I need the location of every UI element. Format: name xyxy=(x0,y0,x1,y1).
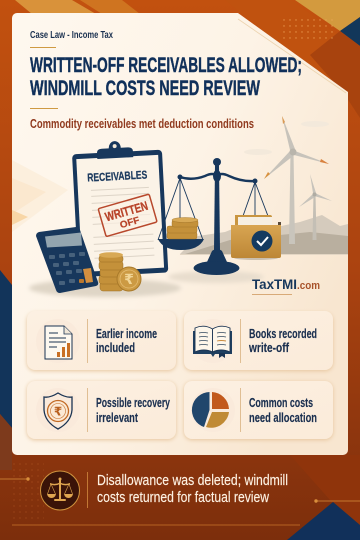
icon: rupee shield xyxy=(44,393,72,429)
footer icon: scales badge xyxy=(40,471,80,510)
card: possible recovery irrelevant: irrelevant xyxy=(96,410,138,425)
card: books recorded write-off xyxy=(184,311,333,371)
illustration: coins and rupee: ₹ xyxy=(124,272,134,288)
card: books recorded write-off: Books recorded xyxy=(249,326,317,341)
stamp: written off xyxy=(98,194,157,237)
card: common costs need allocation xyxy=(184,381,333,440)
card: possible recovery irrelevant xyxy=(27,381,176,440)
icon: report document xyxy=(45,326,72,359)
card: earlier income included xyxy=(27,311,176,371)
card: books recorded write-off: write-off xyxy=(248,340,290,355)
illustration: folder with check xyxy=(231,215,281,260)
subtitle: Commodity receivables met deduction conditions xyxy=(30,116,254,131)
footer conclusion text: costs returned for factual review xyxy=(97,489,269,506)
illustration: clipboard xyxy=(71,139,168,277)
logo: TaxTMI.com: TaxTMI xyxy=(252,276,297,292)
icon: open book xyxy=(193,326,232,358)
eyebrow: case law xyxy=(30,29,113,48)
stamp: written off: WRITTEN xyxy=(103,199,150,224)
card: possible recovery irrelevant: Possible recovery xyxy=(96,395,171,410)
card: common costs need allocation: Common costs xyxy=(249,395,313,410)
footer conclusion text: Disallowance was deleted; windmill xyxy=(97,472,288,489)
card: earlier income included: Earlier income xyxy=(96,326,157,341)
card: earlier income included: included xyxy=(96,340,135,355)
icon: pie chart xyxy=(192,392,229,428)
logo: TaxTMI.com xyxy=(252,276,320,295)
card: common costs need allocation: need allocation xyxy=(249,410,317,425)
illustration: coins and rupee xyxy=(99,252,141,291)
eyebrow: case law: Case Law - Income Tax xyxy=(30,29,113,41)
illustration: wind turbines and hills xyxy=(180,116,348,255)
footer divider xyxy=(86,472,89,508)
stamp: written off: OFF xyxy=(119,215,141,231)
ground shadow xyxy=(29,271,264,297)
icon: rupee shield: ₹ xyxy=(54,404,62,418)
main panel xyxy=(12,13,348,455)
title xyxy=(30,53,302,100)
illustration: clipboard: RECEIVABLES xyxy=(87,169,148,185)
illustration: calculator xyxy=(36,227,98,293)
illustration: balance scale xyxy=(158,158,268,275)
footer conclusion text xyxy=(97,472,288,506)
logo: TaxTMI.com: .com xyxy=(297,280,320,292)
